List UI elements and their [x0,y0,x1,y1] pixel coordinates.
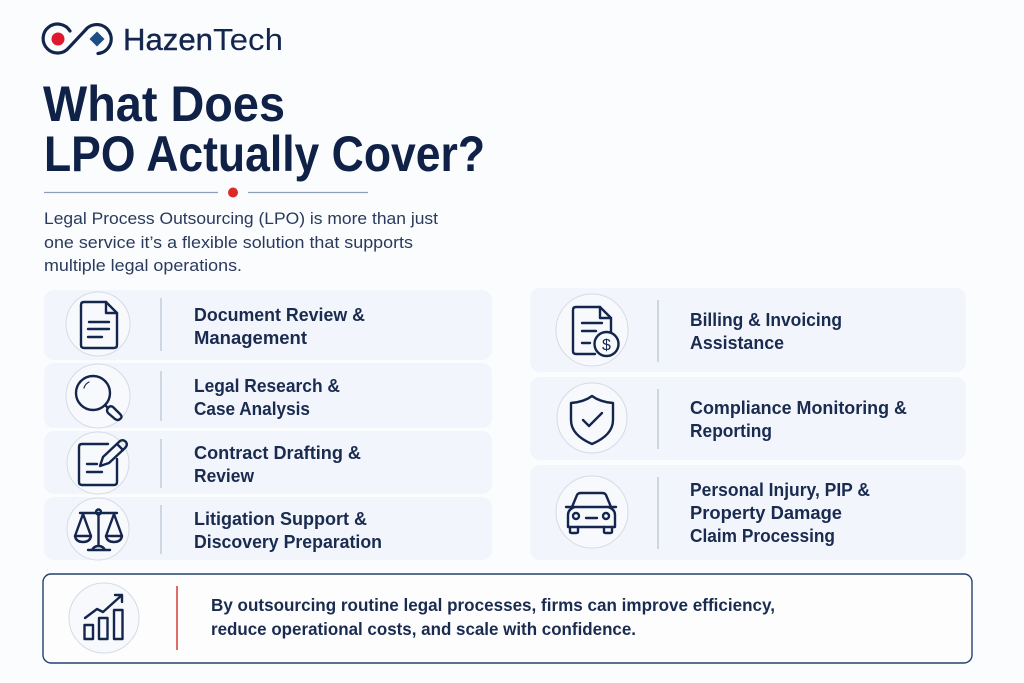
label: Document Review & [194,304,365,325]
callout text [211,595,775,639]
intro paragraph: multiple legal operations. [44,256,242,275]
callout text: reduce operational costs, and scale with confidence. [211,619,636,639]
icon: invoice with dollar coin [573,307,618,356]
label [194,442,361,486]
icon: shield with check [571,396,613,444]
label: Reporting [690,420,772,441]
label [194,508,382,552]
label: Billing & Invoicing [690,309,842,330]
label: Litigation Support & [194,508,367,529]
label: Discovery Preparation [194,531,382,552]
logo wordmark: Tech [213,22,283,57]
dollar glyph: $ [602,337,611,354]
icon: scales of justice [75,510,122,550]
logo wordmark [123,22,283,57]
label: Compliance Monitoring & [690,397,907,418]
label [690,397,907,441]
intro paragraph: one service it’s a flexible solution that supports [44,233,413,252]
intro paragraph: Legal Process Outsourcing (LPO) is more than just [44,209,438,228]
label: Case Analysis [194,398,310,419]
title: What Does [43,76,285,132]
icon: magnifier [76,376,122,420]
title [43,76,485,182]
label: Property Damage [690,502,842,523]
panel: personal injury [530,465,966,560]
panel: billing [530,288,966,372]
label [690,309,842,353]
panel: conclusion callout [43,574,972,663]
label: Review [194,465,255,486]
panel: litigation support [44,497,492,560]
label [194,375,340,419]
label [690,479,870,546]
title: LPO Actually Cover? [44,126,485,182]
icon: document [81,302,117,348]
label: Assistance [690,332,784,353]
title divider with red dot [44,188,368,198]
panel: contract drafting [44,431,492,494]
callout text: By outsourcing routine legal processes, firms can improve efficiency, [211,595,775,615]
label: Legal Research & [194,375,340,396]
icon: growth chart [84,595,122,639]
icon: contract and pen [79,440,127,485]
panel: document review [44,290,492,360]
label [194,304,365,348]
label: Contract Drafting & [194,442,361,463]
panel: compliance [530,377,966,460]
icon: car [566,493,616,533]
panel: legal research [44,363,492,428]
label: Claim Processing [690,525,835,546]
label: Management [194,327,307,348]
logo wordmark: Hazen [123,22,213,57]
label: Personal Injury, PIP & [690,479,870,500]
icon: logo infinity mark [43,24,111,54]
intro paragraph [44,209,438,275]
logo [43,22,283,57]
